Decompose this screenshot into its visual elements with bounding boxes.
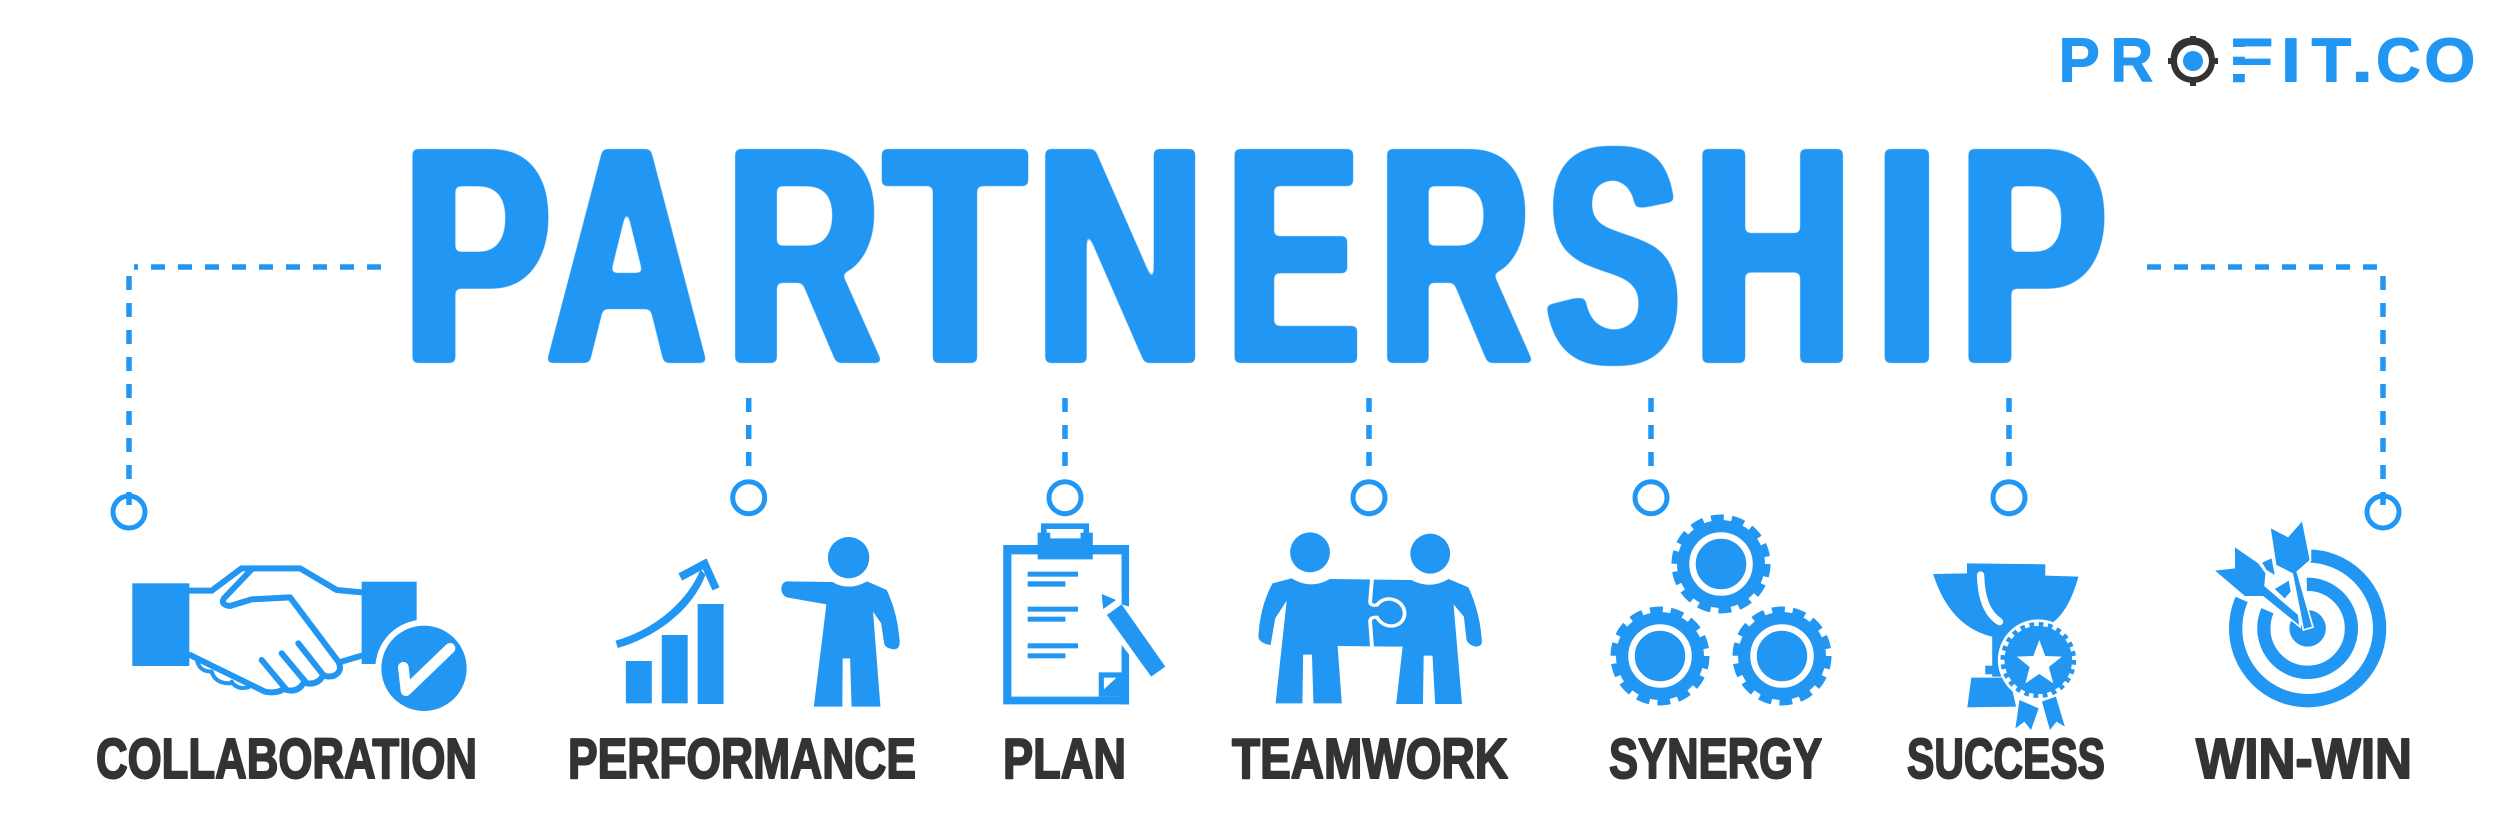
logo: PROFIT.CO: F [2229, 27, 2273, 95]
title: PARTNERSHIP: R [1378, 83, 1531, 427]
label: SYNERGY: SYNERGY [1609, 727, 1822, 791]
connector: synergy [1635, 398, 1667, 514]
connector: performance [733, 398, 765, 514]
icon: three gears [1615, 519, 1827, 701]
title: PARTNERSHIP: A [547, 84, 706, 427]
title: PARTNERSHIP [403, 83, 2106, 427]
label: WIN-WIN: WIN-WIN [2196, 727, 2412, 791]
connector: plan [1049, 398, 1081, 514]
connector: right bracket to win-win [2147, 267, 2399, 528]
title: PARTNERSHIP: R [726, 84, 880, 427]
title: PARTNERSHIP: T [885, 85, 1025, 427]
title: PARTNERSHIP: I [1875, 85, 1939, 427]
logo: PROFIT.CO: O [2424, 25, 2475, 95]
logo: PROFIT.CO: I [2281, 27, 2301, 95]
logo: PROFIT.CO: C [2376, 26, 2421, 96]
label: SUCCESS: SUCCESS [1907, 727, 2105, 791]
icon: trophy with star medal [1933, 563, 2079, 730]
icon: teamwork, two people joined by puzzle [1258, 532, 1482, 704]
label: PERFORMANCE: PERFORMANCE [568, 727, 916, 791]
connector: teamwork [1353, 398, 1385, 514]
title: PARTNERSHIP: N [1035, 83, 1205, 427]
logo: PROFIT.CO: . [2351, 26, 2373, 95]
logo: PROFIT.CO: R [2111, 25, 2153, 95]
logo: PROFIT.CO: P [2058, 26, 2100, 96]
title: PARTNERSHIP: P [403, 84, 550, 427]
logo: PROFIT.CO: T [2312, 26, 2351, 95]
connector: left bracket to collaboration [113, 267, 381, 528]
logo: PROFIT.CO: O [2169, 26, 2217, 96]
icon: handshake with check badge [132, 568, 473, 717]
icon: growth chart and pointing person [616, 537, 900, 707]
logo: PROFIT.CO [2058, 25, 2475, 96]
title: PARTNERSHIP: E [1227, 84, 1359, 427]
title: PARTNERSHIP: P [1959, 84, 2106, 427]
title: PARTNERSHIP: S [1546, 84, 1680, 427]
icon: target with two arrows [2215, 517, 2380, 701]
icon: clipboard plan with pencil [1003, 523, 1172, 704]
title: PARTNERSHIP: H [1693, 83, 1852, 427]
connector: success [1993, 398, 2025, 514]
label: PLAN: PLAN [1003, 727, 1126, 791]
label: COLLABORATION: COLLABORATION [96, 727, 477, 791]
label: TEAMWORK: TEAMWORK [1232, 727, 1508, 791]
